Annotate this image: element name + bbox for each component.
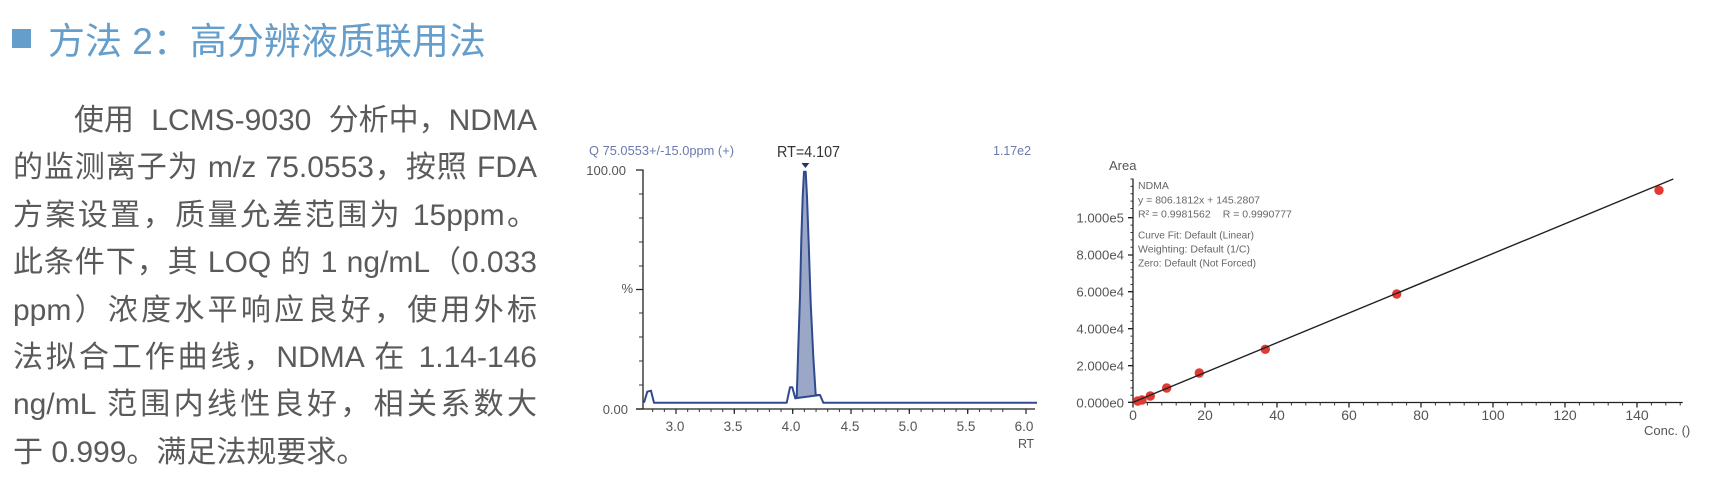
regression annotation: Curve Fit: Default (Linear) <box>1138 229 1254 241</box>
chromatogram header: retention time: RT=4.107 <box>777 144 840 161</box>
chromatogram x axis: 5.0 <box>899 419 917 434</box>
calibration x axis: 60 <box>1341 407 1357 423</box>
chromatogram x axis: 4.0 <box>782 419 800 434</box>
chart: chromatogram <box>586 143 1037 451</box>
regression annotation: R² = 0.9981562 <box>1138 208 1211 220</box>
chromatogram trace <box>644 172 1037 403</box>
calibration x axis: 0 <box>1129 407 1137 423</box>
chromatogram x axis <box>636 409 1035 451</box>
calibration y axis: 0.000e0 <box>1076 396 1124 410</box>
text block: method description <box>13 104 537 469</box>
calibration x axis: 120 <box>1553 407 1577 423</box>
calibration y axis: 6.000e4 <box>1076 284 1124 300</box>
peak integration baseline <box>795 395 820 398</box>
text block: method description: ppm）浓度水平响应良好，使用外标 <box>13 294 537 327</box>
regression line <box>1133 179 1673 402</box>
calibration x axis <box>1129 402 1690 438</box>
chromatogram header: ion trace: Q 75.0553+/-15.0ppm (+) <box>589 143 734 158</box>
chromatogram x axis: 5.5 <box>957 419 975 434</box>
chromatogram y axis: % <box>621 281 633 296</box>
calibration y axis: 4.000e4 <box>1076 322 1124 336</box>
regression annotation: Weighting: Default (1/C) <box>1138 243 1250 255</box>
data points <box>1133 186 1664 406</box>
calibration x axis: 100 <box>1481 407 1505 423</box>
text block: method description: 法拟合工作曲线，NDMA 在 1.14-146 <box>13 341 537 374</box>
regression annotation: R = 0.9990777 <box>1223 208 1292 220</box>
calibration x axis: 20 <box>1197 407 1213 423</box>
calibration x axis: 140 <box>1625 407 1649 423</box>
chromatogram x axis: R T <box>1018 437 1034 451</box>
heading: method 2 title <box>12 21 486 62</box>
calibration x axis: 40 <box>1269 407 1285 423</box>
chromatogram x axis: 3.5 <box>724 419 742 434</box>
icon: blue square bullet <box>12 29 31 48</box>
text block: method description: LCMS-9030 <box>151 104 311 137</box>
calibration x axis: Conc. () <box>1644 423 1690 438</box>
calibration y axis: Area <box>1109 158 1137 173</box>
regression annotation: y = 806.1812x + 145.2807 <box>1138 194 1260 206</box>
text block: method description: 的监测离子为 m/z 75.0553，按照 FDA <box>13 151 537 184</box>
text block: method description: 分析中，NDMA <box>329 104 537 137</box>
regression annotation <box>1138 180 1292 270</box>
chart: calibration curve <box>1076 158 1690 438</box>
regression annotation: NDMA <box>1138 180 1169 192</box>
calibration y axis <box>1076 158 1137 410</box>
text block: method description: ng/mL 范围内线性良好，相关系数大 <box>13 388 537 421</box>
chromatogram y axis <box>586 163 643 417</box>
icon: peak marker triangle <box>802 163 809 168</box>
chromatogram x axis: 4.5 <box>841 419 859 434</box>
text block: method description: 使用 <box>74 104 134 137</box>
text block: method description: 此条件下，其 LOQ 的 1 ng/mL（0.033 <box>13 246 537 279</box>
chromatogram y axis: 0.00 <box>603 402 628 417</box>
integrated peak area <box>797 172 816 398</box>
heading text: 方法 2：高分辨液质联用法 <box>48 21 486 62</box>
calibration x axis: 80 <box>1413 407 1429 423</box>
calibration y axis: 1.000e5 <box>1076 210 1124 226</box>
regression annotation: Zero: Default (Not Forced) <box>1138 258 1256 270</box>
chromatogram x axis: 3.0 <box>666 419 684 434</box>
text block: method description: 于 0.999。满足法规要求。 <box>13 436 366 469</box>
text block: method description: 方案设置，质量允差范围为 15ppm。 <box>13 199 537 232</box>
chromatogram y axis: 100.00 <box>586 163 626 178</box>
calibration y axis: 8.000e4 <box>1076 248 1124 262</box>
chromatogram x axis: 6.0 <box>1015 419 1033 434</box>
chromatogram header: intensity: 1.17e2 <box>993 143 1031 158</box>
calibration y axis: 2.000e4 <box>1076 358 1124 374</box>
